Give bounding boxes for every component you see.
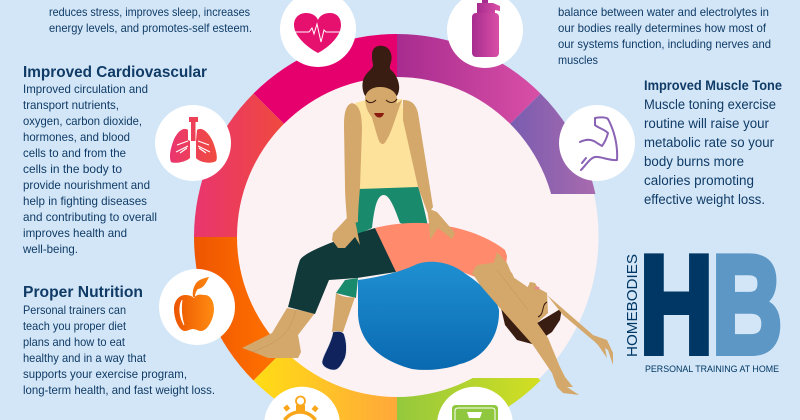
body text	[644, 97, 776, 207]
trainer right arm	[403, 100, 433, 214]
panel: improved muscle tone	[644, 77, 782, 207]
logo letter B: B	[712, 227, 782, 383]
lips	[534, 287, 540, 289]
text: hydration benefit: balance between water and electrolytes in	[558, 5, 769, 19]
trainer green pants	[345, 186, 429, 240]
client upper body and head	[472, 252, 613, 395]
trainer hair	[362, 46, 399, 97]
body text: oxygen, carbon dioxide,	[23, 114, 142, 128]
icon: stopwatch	[264, 387, 340, 420]
trainer left hand	[332, 218, 360, 248]
text: hydration benefit	[558, 5, 771, 67]
body text: effective weight loss.	[644, 192, 765, 207]
body text: well-being.	[22, 242, 78, 256]
body text: and contributing to overall	[23, 210, 157, 224]
client feet and calves	[242, 308, 315, 358]
panel: proper nutrition	[23, 284, 215, 397]
ring segment: red	[194, 94, 397, 237]
trainer eyes	[366, 99, 397, 103]
trainer face	[365, 87, 397, 122]
body text: Personal trainers can	[23, 303, 126, 317]
logo letter H: H	[640, 227, 713, 382]
ring segment: magenta	[254, 34, 397, 237]
illustration: woman assisting client on ball	[242, 46, 613, 395]
trainer right hand	[427, 208, 455, 240]
body text: body burns more	[644, 154, 744, 169]
body text: healthy and in a way that	[23, 351, 147, 365]
text: stress and energy benefit: energy levels, and promotes-self esteem.	[49, 21, 252, 35]
body text: improves health and	[23, 226, 127, 240]
chest and shoulder	[472, 252, 532, 310]
coral shirt	[375, 223, 507, 278]
trainer mouth	[374, 113, 384, 118]
heading: Improved Muscle Tone	[644, 77, 782, 93]
body text: long-term health, and fast weight loss.	[23, 383, 215, 397]
logo tagline: PERSONAL TRAINING AT HOME	[645, 364, 779, 375]
ring segment: plum	[397, 34, 540, 237]
client dark pants	[288, 228, 396, 314]
cream inner circle	[237, 77, 557, 397]
body text: transport nutrients,	[23, 98, 119, 112]
text: hydration benefit: our bodies really determines how most of	[558, 21, 767, 35]
body text: hormones, and blood	[23, 130, 130, 144]
body text: help in fighting diseases	[23, 194, 147, 208]
text: stress and energy benefit: reduces stress, improves sleep, increases	[49, 5, 250, 19]
ring segment: green	[397, 378, 540, 420]
body text: cells in the body to	[23, 162, 122, 176]
hair	[501, 308, 562, 344]
ring segment: yellow	[254, 237, 397, 420]
panel: improved cardiovascular	[22, 64, 207, 256]
head	[523, 282, 548, 323]
text: hydration benefit: muscles	[558, 53, 598, 67]
icon: water bottle	[447, 0, 523, 68]
near arm	[473, 262, 579, 395]
exercise ball	[358, 262, 499, 370]
trainer figure	[344, 46, 507, 278]
body text: provide nourishment and	[23, 178, 150, 192]
stretched far arm	[547, 295, 613, 365]
icon: apple	[159, 269, 235, 345]
body text: metabolic rate so your	[644, 135, 774, 150]
logo wordmark: HOMEBODIES	[624, 254, 641, 357]
heading: Improved Cardiovascular	[23, 64, 207, 81]
arm crease	[497, 270, 528, 310]
body text: Improved circulation and	[23, 82, 148, 96]
trainer left arm	[344, 103, 362, 225]
icon: flexed muscle	[559, 105, 635, 181]
trainer yellow top	[355, 99, 418, 189]
icon: heart with pulse	[280, 0, 356, 67]
body text: cells to and from the	[23, 146, 126, 160]
body text: teach you proper diet	[23, 319, 127, 333]
body text: supports your exercise program,	[23, 367, 187, 381]
text: hydration benefit: our systems function, including nerves and	[558, 37, 771, 51]
body text: Muscle toning exercise	[644, 97, 776, 112]
body text	[23, 303, 215, 397]
benefits ring	[194, 34, 598, 420]
heading: Proper Nutrition	[23, 284, 143, 301]
icon: bathroom scale	[437, 387, 513, 420]
body text: calories promoting	[644, 173, 754, 188]
ring segment: purple	[440, 94, 595, 194]
body text: routine will raise your	[644, 116, 769, 131]
client back lower leg and shoe	[322, 278, 358, 370]
ring segment: orange	[194, 237, 397, 380]
body text: plans and how to eat	[23, 335, 126, 349]
calf crease	[252, 310, 296, 352]
trainer neck and chest	[366, 100, 402, 144]
logo: Homebodies HB	[624, 227, 782, 383]
cream right extension	[397, 194, 598, 378]
client front legs	[242, 218, 396, 358]
text: stress and energy benefit	[49, 5, 252, 35]
body text	[22, 82, 157, 256]
closed eye	[538, 302, 547, 317]
icon: lungs	[155, 105, 231, 181]
